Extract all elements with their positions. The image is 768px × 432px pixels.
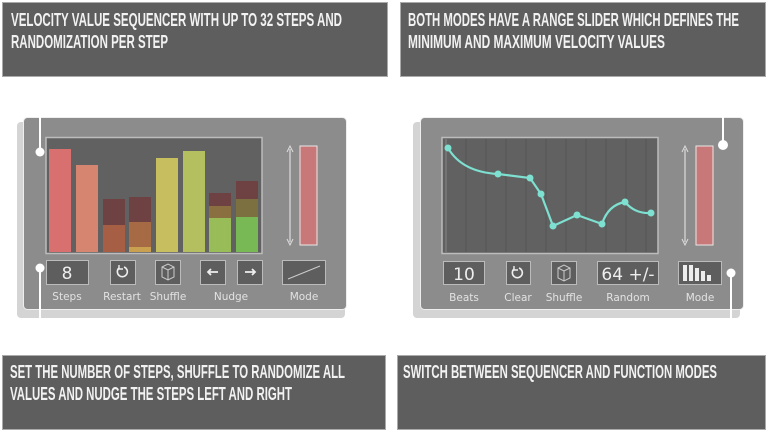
control: shuffle — [150, 260, 186, 303]
control: beats: Beats — [449, 292, 479, 304]
control: mode bars: Mode — [686, 292, 714, 304]
callout lines right — [718, 100, 728, 150]
caption box: bottom-right — [398, 356, 766, 430]
panel: sequencer — [17, 118, 346, 318]
control: mode line — [282, 260, 326, 303]
control: mode line: Mode — [290, 291, 318, 303]
control: beats: 10 — [453, 265, 475, 285]
caption box: bottom-left: VALUES AND NUDGE THE STEPS LEFT AND RIGHT — [10, 384, 292, 404]
bar chart: velocity steps — [46, 138, 262, 254]
callout lines left — [36, 100, 44, 156]
control: random: 64 +/- — [601, 265, 655, 285]
control: mode bars — [678, 262, 722, 304]
control: random — [598, 262, 658, 304]
caption box: top-left: VELOCITY VALUE SEQUENCER WITH UP TO 32 STEPS AND — [11, 10, 342, 30]
control: nudge: Nudge — [214, 291, 248, 303]
caption box: top-right — [400, 2, 766, 76]
caption box: top-left: RANDOMIZATION PER STEP — [11, 32, 168, 52]
control: random: Random — [606, 292, 650, 304]
control: nudge — [200, 260, 262, 303]
control: clear — [504, 262, 532, 304]
control: restart: Restart — [103, 291, 141, 303]
control: steps — [46, 260, 88, 303]
control: shuffle: Shuffle — [150, 291, 186, 303]
range slider — [287, 146, 317, 245]
line chart: function curve — [442, 138, 658, 254]
control: restart — [103, 260, 141, 303]
control: shuffle — [546, 262, 582, 304]
control: shuffle: Shuffle — [546, 292, 582, 304]
panel: function — [413, 118, 744, 318]
caption box: top-left — [2, 2, 388, 76]
control: steps: Steps — [52, 291, 82, 303]
control: steps: 8 — [62, 264, 72, 284]
control: clear: Clear — [504, 292, 532, 304]
caption box: bottom-left — [2, 356, 386, 430]
control: beats — [444, 262, 484, 304]
range slider — [682, 146, 713, 245]
caption box: bottom-left: SET THE NUMBER OF STEPS, SHUFFLE TO RANDOMIZE ALL — [10, 362, 345, 382]
